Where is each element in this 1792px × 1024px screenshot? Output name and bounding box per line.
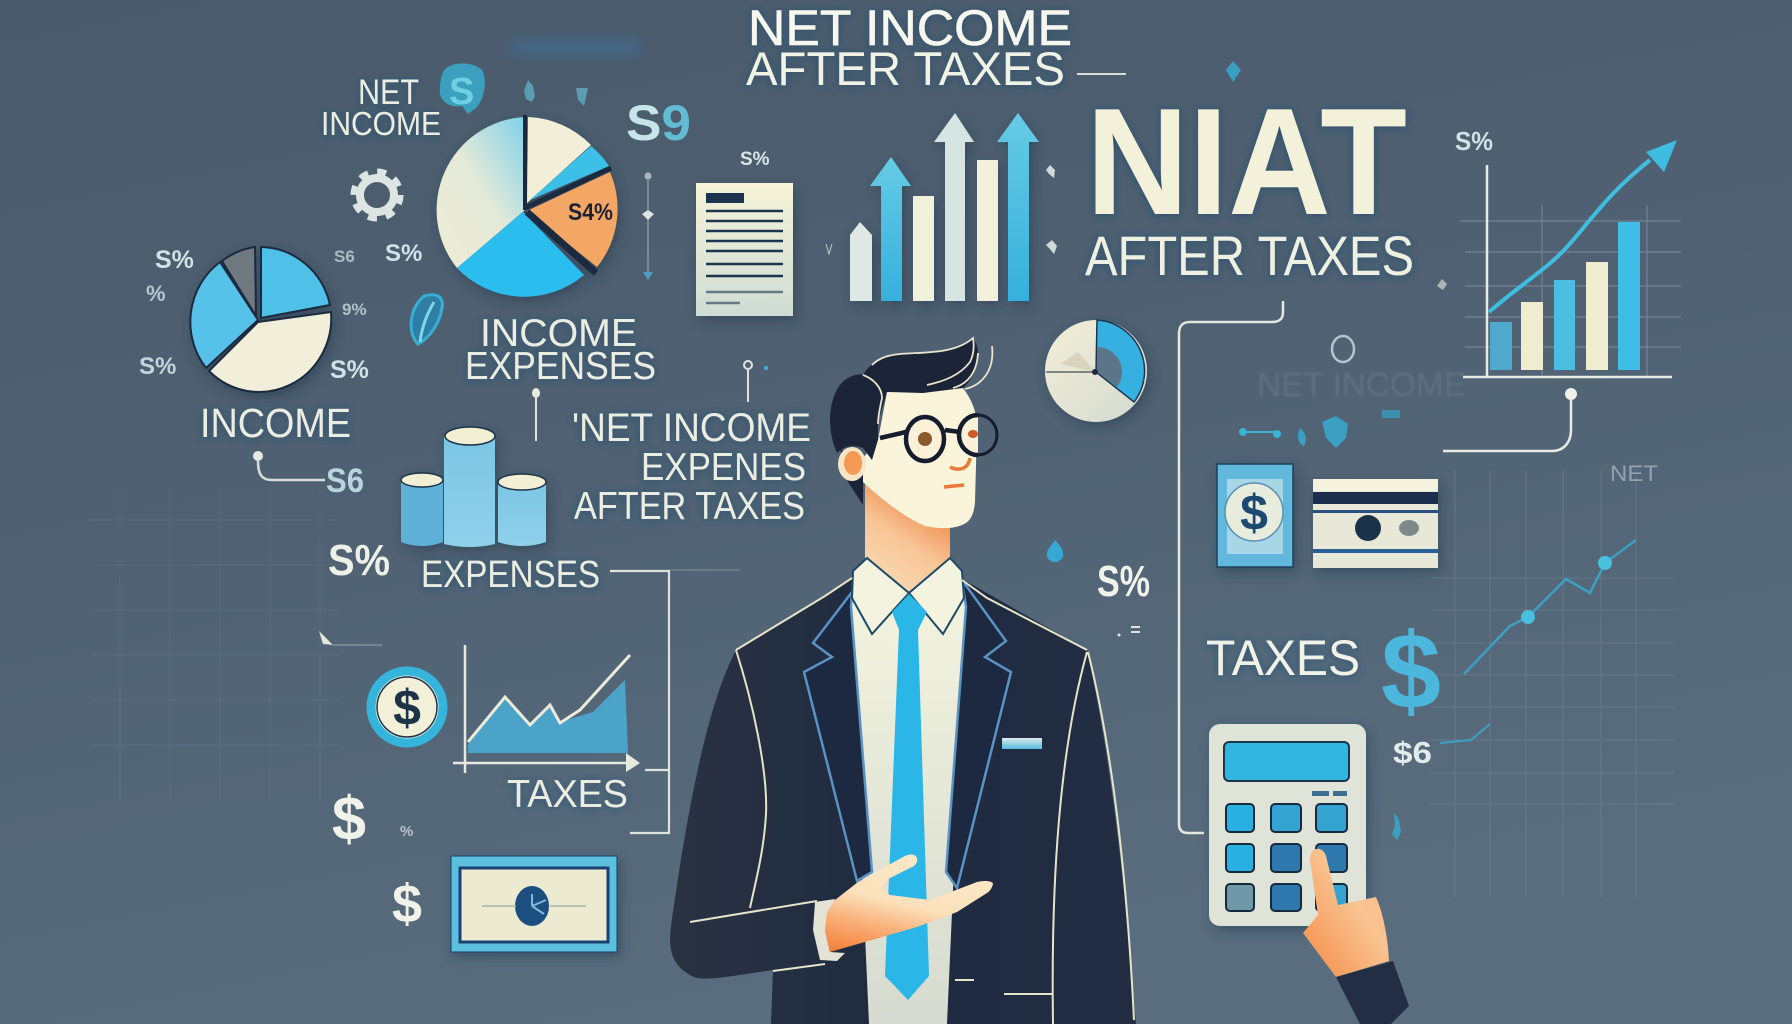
right bar and line chart — [1460, 140, 1681, 378]
person — [670, 338, 1136, 1024]
connector: S6 callout — [253, 451, 364, 500]
icon: banknote card — [1313, 479, 1438, 568]
left lapel — [804, 592, 872, 881]
label: income expenses: EXPENSES — [465, 345, 656, 388]
label: income: INCOME — [200, 400, 351, 446]
label: taxes: TAXES — [1206, 630, 1360, 686]
pointer above net income text — [744, 361, 768, 402]
text block: net income expenses after taxes: AFTER TAXES — [574, 485, 805, 528]
percent labels around pie: S% — [139, 353, 176, 380]
small teal glyphs — [524, 80, 588, 106]
percent labels around pie: 9% — [342, 300, 367, 319]
shirt — [850, 600, 966, 1024]
jacket outlines — [690, 578, 1134, 1024]
label: S9: S9 — [626, 95, 691, 151]
ghost text: net income: NET INCOME — [1257, 366, 1466, 404]
tie — [885, 594, 929, 1000]
label: S% centre — [1097, 557, 1150, 636]
pocket square — [1002, 738, 1042, 749]
chart: large pie — [437, 115, 618, 297]
percent labels around pie: S% — [385, 240, 422, 267]
icon: small teal marker top — [1226, 61, 1241, 82]
cuff — [813, 899, 845, 961]
neck — [865, 480, 950, 592]
icon: teal leaf — [411, 295, 442, 344]
vertical pointer with markers — [642, 172, 654, 280]
percent labels around pie: % — [146, 281, 166, 306]
label: income expenses: INCOME — [480, 312, 637, 355]
right lapel — [946, 580, 1011, 888]
hand pressing calculator — [1303, 849, 1409, 1024]
icon: calculator — [1209, 724, 1366, 926]
text block: net income expenses after taxes: EXPENES — [641, 446, 806, 489]
icon: teal dollar blob — [440, 63, 485, 114]
left collar — [852, 558, 909, 634]
label: expenses: EXPENSES — [421, 554, 600, 596]
label: taxes under chart: TAXES — [507, 773, 628, 816]
icon: gear — [354, 172, 400, 218]
label: S% on right chart: S% — [1455, 126, 1493, 156]
line chart: lower right — [1440, 540, 1636, 743]
percent labels around pie — [139, 240, 422, 384]
jacket — [670, 578, 1136, 1024]
pointer above cylinders — [532, 388, 540, 441]
blurred smudge near top — [510, 36, 640, 58]
label: S% left: S% — [328, 536, 390, 585]
bracket connector: expenses to taxes — [610, 570, 740, 833]
label: net income (left): NET — [358, 73, 419, 112]
icon: dollar coin — [371, 671, 443, 743]
hand — [825, 854, 993, 952]
label: S% above document: S% — [740, 149, 770, 170]
title connector line — [1077, 73, 1126, 75]
small pin near right chart — [1437, 279, 1447, 290]
connector: niat to calculator — [1179, 301, 1283, 833]
label: net income (left) — [321, 73, 441, 142]
title: NET INCOME — [748, 0, 1072, 56]
connector: S6 callout: S6 — [326, 462, 364, 500]
glasses — [880, 415, 997, 461]
icon: money frame — [1217, 464, 1293, 567]
ear — [838, 447, 866, 481]
percent labels around pie: S% — [330, 356, 369, 384]
icon: dollar signs — [332, 785, 422, 934]
label: S% centre: S% — [1097, 557, 1150, 606]
nose and mouth — [944, 458, 970, 487]
pie value label: S4% — [568, 199, 613, 226]
heading: NIAT: NIAT — [1086, 77, 1407, 247]
connector: right chart — [1443, 388, 1577, 451]
icon: large dollar: $ — [1381, 610, 1441, 731]
hair behind ear — [840, 448, 863, 505]
small pie near head — [1045, 320, 1147, 422]
label: income expenses — [465, 312, 656, 388]
eyes — [918, 432, 932, 446]
label: net income (left): INCOME — [321, 105, 441, 142]
small percent mark: % — [400, 823, 413, 840]
faint grid: left — [90, 490, 340, 800]
percent labels around pie: S6 — [334, 247, 355, 266]
heading: after taxes: AFTER TAXES — [1085, 224, 1414, 287]
area chart — [453, 645, 640, 773]
small teal icons — [1239, 336, 1400, 448]
ghost text: net: NET — [1610, 461, 1658, 486]
title: AFTER TAXES — [746, 42, 1065, 95]
hair highlights — [863, 338, 992, 424]
sleeve — [1336, 961, 1409, 1024]
text block: net income expenses after taxes — [572, 406, 811, 528]
icon: dollar coin: $ — [393, 680, 421, 736]
icon: teal dollar blob: S — [449, 71, 474, 113]
cursor mark — [319, 631, 382, 645]
label: $6: $6 — [1393, 735, 1432, 770]
face — [863, 388, 977, 528]
faint grid: lower right — [1431, 470, 1674, 897]
title — [746, 0, 1072, 95]
right collar — [909, 558, 964, 634]
document icon — [696, 183, 793, 316]
text block: net income expenses after taxes: 'NET INCOME — [572, 406, 811, 450]
small sparkles by bar chart — [826, 165, 1057, 254]
icon: banknote — [451, 856, 617, 952]
hair — [830, 338, 978, 460]
chart: small pie — [190, 247, 331, 392]
icon: money frame: $ — [1240, 485, 1268, 541]
icon: dollar signs: $ — [392, 874, 422, 934]
icon: teal drop — [1047, 540, 1063, 562]
bar chart with arrows — [850, 113, 1039, 301]
small teal mark — [1392, 812, 1401, 840]
percent labels around pie: S% — [155, 246, 194, 274]
cylinders chart — [401, 427, 546, 547]
icon: dollar signs: $ — [332, 785, 366, 854]
